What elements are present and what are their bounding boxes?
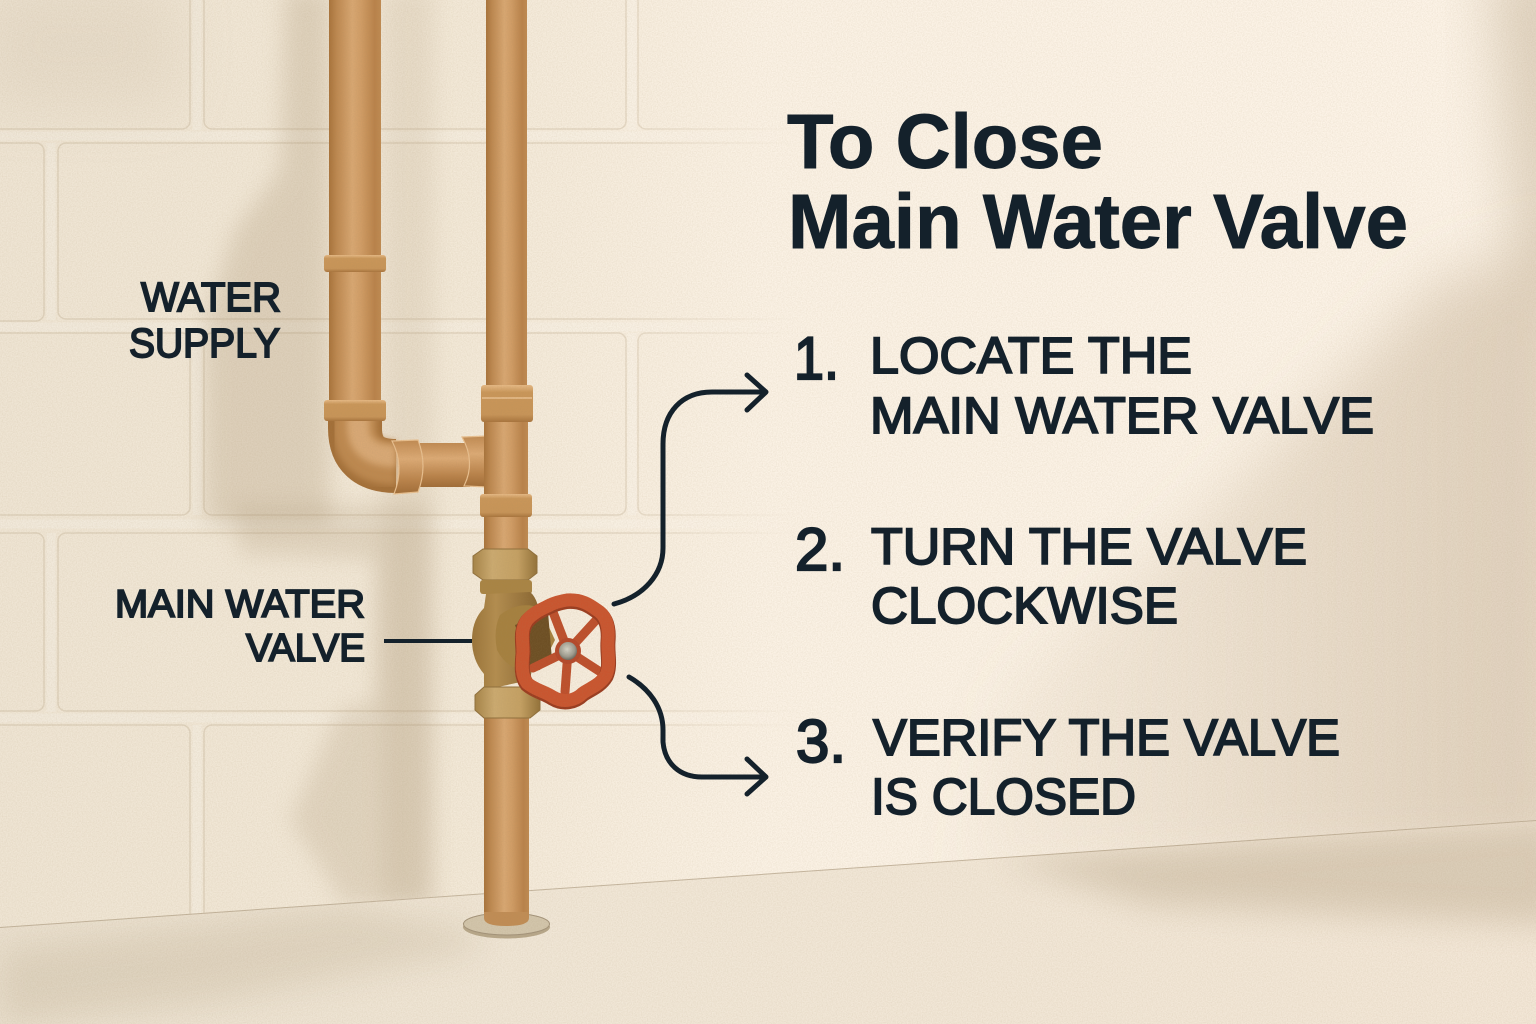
step 2 [795, 516, 1307, 634]
step 2: CLOCKWISE [871, 577, 1178, 634]
tee and vertical below [484, 420, 528, 552]
step 1: 1. [794, 325, 839, 392]
silver cap [559, 642, 577, 660]
title [787, 99, 1408, 265]
label: water supply: WATER [141, 274, 281, 320]
main casting [472, 592, 540, 690]
step 1 [794, 325, 1374, 444]
left vertical pipe [329, 0, 381, 405]
wheel spokes [533, 612, 602, 692]
copper pipework [324, 0, 533, 925]
tee lower collar [480, 494, 532, 517]
step 2: 2. [795, 516, 845, 583]
upper hex nut [473, 549, 537, 580]
arrow to step 3 [629, 677, 766, 794]
neck collar [480, 580, 532, 594]
step 3: IS CLOSED [871, 768, 1136, 825]
step 3: VERIFY THE VALVE [873, 709, 1340, 766]
wheel rim [522, 600, 609, 700]
upper right collar [481, 385, 533, 422]
label: main water valve [115, 583, 365, 670]
arrow to step 1 [614, 375, 766, 604]
right vertical pipe [486, 0, 527, 390]
horizontal pipe [420, 443, 470, 487]
wheel rim shadow [522, 601, 609, 702]
step 1: MAIN WATER VALVE [870, 387, 1374, 444]
floor [0, 800, 1536, 1024]
step 3 [796, 708, 1340, 825]
lower hex nut [475, 687, 540, 718]
wall bricks [0, 0, 746, 914]
upper pipe collar [324, 255, 386, 272]
step 3: 3. [796, 708, 846, 775]
valve body [472, 549, 555, 718]
label: water supply: SUPPLY [129, 320, 280, 366]
stem shadow [515, 612, 552, 668]
floor flange [463, 912, 550, 938]
lower left pipe collar [324, 400, 386, 421]
label: main water valve: MAIN WATER [115, 583, 365, 626]
leader line to valve [384, 639, 472, 643]
stem boss [496, 605, 555, 671]
elbow joint [355, 415, 396, 466]
elbow coupling [392, 440, 423, 494]
step 2: TURN THE VALVE [871, 518, 1307, 575]
wheel hub [555, 638, 581, 664]
title: Main Water Valve [788, 179, 1408, 265]
red valve handwheel [522, 600, 609, 702]
step 1: LOCATE THE [870, 327, 1192, 384]
tee coupling [462, 436, 488, 487]
title: To Close [787, 99, 1103, 185]
label: water supply [129, 274, 281, 366]
label: main water valve: VALVE [246, 627, 365, 670]
lower pipe [484, 712, 529, 925]
